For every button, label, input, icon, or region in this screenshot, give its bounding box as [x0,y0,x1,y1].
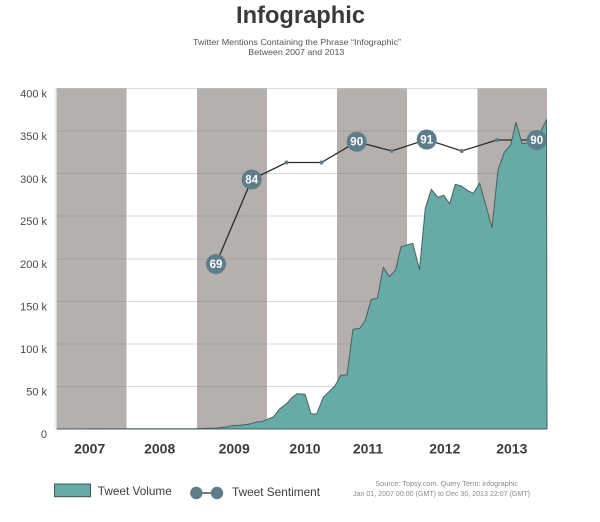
y axis labels: 300 k [20,174,47,186]
x axis labels: 2007 [74,440,105,456]
x axis labels: 2012 [429,440,461,456]
y axis labels: 200 k [20,259,47,271]
y axis labels: 150 k [20,302,47,314]
x axis labels: 2009 [219,440,250,456]
marker 90 (2013): 90 [530,135,543,147]
legend: tweet sentiment [190,486,321,499]
legend: tweet volume: Tweet Volume [98,485,172,498]
source note: Jan 01, 2007 00:00 (GMT) to Dec 30, 2013 22:07 (GMT) [353,489,530,498]
subtitle [193,37,401,57]
marker 84: 84 [245,174,259,186]
x axis labels [74,440,528,456]
subtitle: Twitter Mentions Containing the Phrase “Infographic” [193,37,401,47]
chart [20,88,547,456]
year bands [56,88,547,429]
x axis labels: 2011 [353,440,383,456]
y axis labels: 350 k [20,131,47,143]
marker 69 [206,254,226,274]
marker 90 (2011) [347,132,367,152]
legend: tweet volume [54,484,172,498]
y axis labels: 400 k [20,88,47,100]
marker 91: 91 [420,134,434,146]
y axis labels: 50 k [26,386,47,398]
source note: Source: Topsy.com. Query Term: infographic [375,479,518,488]
y axis labels [20,88,47,441]
title: Infographic [236,2,365,29]
tweet volume area [57,120,547,429]
marker 90 (2011): 90 [350,137,363,149]
sentiment labelled markers [206,130,547,274]
y axis labels: 100 k [20,344,47,356]
marker 91 [417,130,437,150]
marker 69: 69 [210,259,222,271]
y axis labels: 250 k [20,216,47,228]
small sentiment markers [284,138,499,164]
x axis labels: 2010 [289,440,321,456]
y axis labels: 0 [41,429,47,441]
x axis labels: 2008 [144,440,175,456]
legend: tweet sentiment: Tweet Sentiment [232,486,321,499]
x axis labels: 2013 [496,440,528,456]
sentiment line [216,140,537,264]
source note [353,479,530,498]
marker 90 (2013) [527,130,547,150]
subtitle: Between 2007 and 2013 [248,47,345,57]
marker 84 [242,170,262,190]
